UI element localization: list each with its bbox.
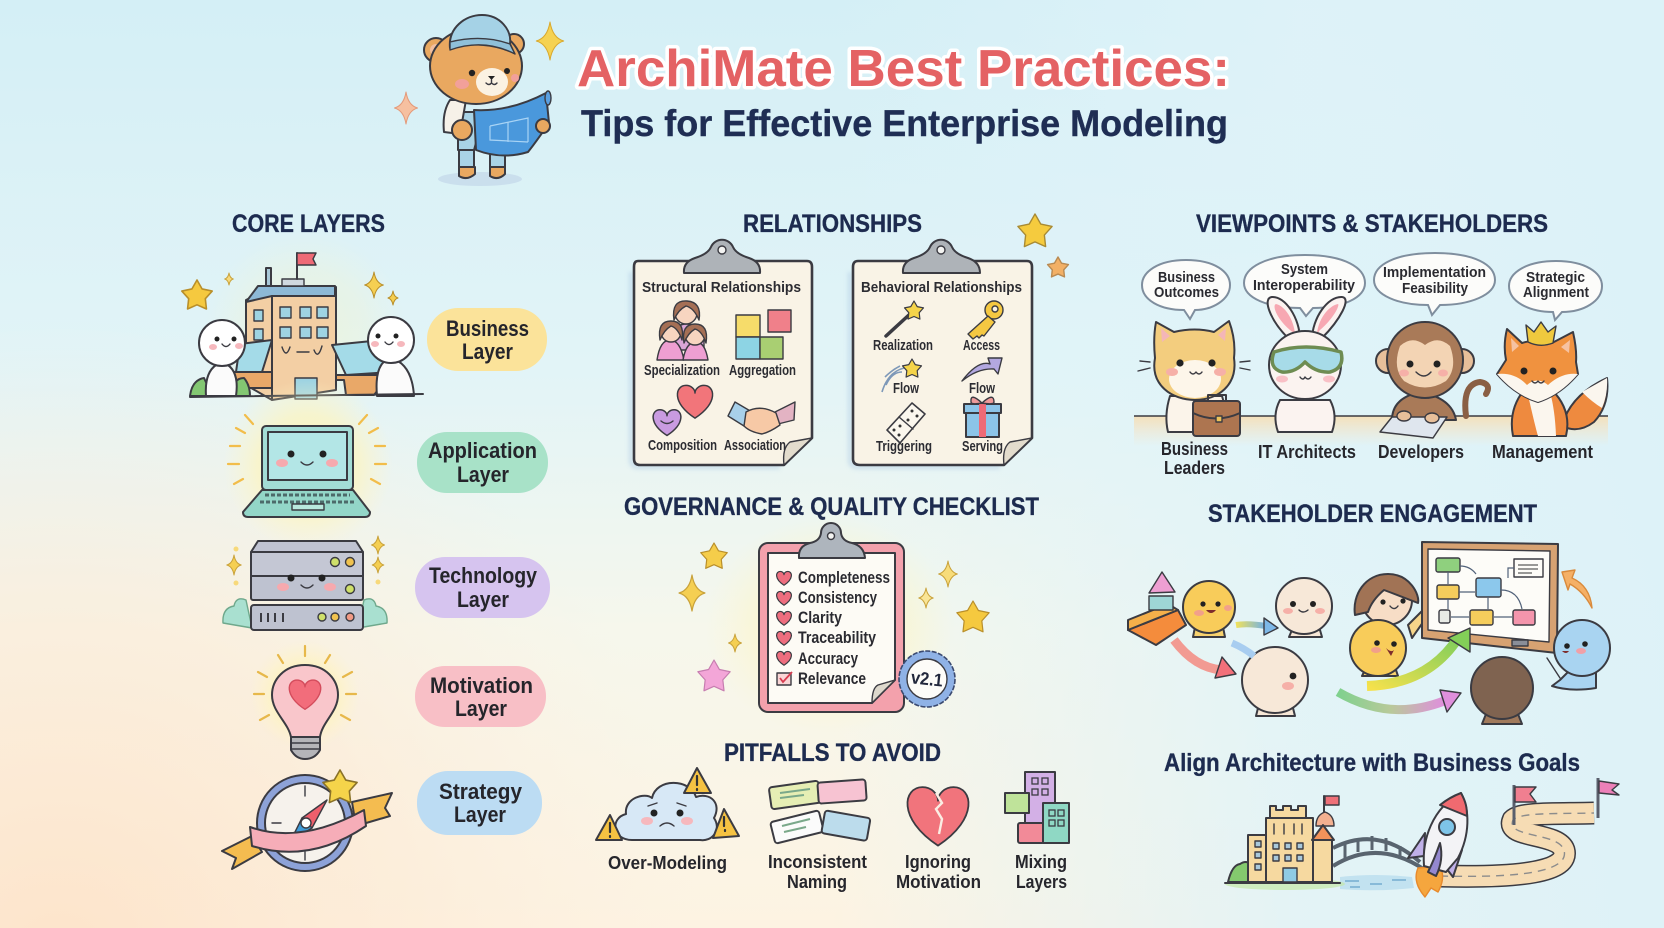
pill: application layer	[417, 432, 548, 493]
icon: rocket	[1408, 793, 1467, 897]
arrow: orange	[1562, 570, 1592, 608]
text: composition association: Composition	[648, 437, 717, 454]
icon: bear mascot with blueprint	[424, 15, 551, 186]
text: composition association	[648, 437, 786, 454]
icon: water	[1340, 875, 1414, 890]
label: business leaders	[1161, 439, 1228, 478]
icon: aggregation puzzle	[736, 310, 791, 359]
label: business leaders: Leaders	[1164, 458, 1225, 478]
title	[577, 40, 1230, 144]
panel: core layers	[182, 210, 550, 871]
heading: structural relationships: Structural Relationships	[642, 279, 801, 296]
character: yellow person with blocks	[1183, 581, 1235, 637]
icon: inconsistent cards	[769, 779, 871, 844]
label: it architects: IT Architects	[1258, 442, 1356, 462]
list: checklist items: Accuracy	[798, 650, 859, 668]
text: flow labels: Flow	[893, 380, 919, 397]
list: checklist items: Completeness	[798, 569, 890, 587]
speech bubble: system interoperability: Interoperability	[1253, 277, 1356, 294]
icon: composition hearts	[653, 385, 713, 436]
pill: technology layer: Technology	[429, 563, 538, 588]
character: cream person	[1276, 578, 1332, 637]
glow behind clipboard	[705, 515, 955, 735]
title: ArchiMate Best Practices:	[577, 40, 1230, 98]
speech bubble: business outcomes: Outcomes	[1154, 284, 1219, 301]
character: cat with briefcase	[1138, 321, 1250, 436]
pill: business layer: Business	[446, 316, 529, 341]
character: fox with crown	[1497, 322, 1607, 436]
pill: strategy layer	[417, 771, 542, 835]
icon: castle	[1225, 796, 1345, 890]
label: inconsistent naming: Inconsistent	[768, 852, 867, 872]
text: triggering serving	[876, 438, 1003, 455]
arrow: green purple	[1338, 690, 1461, 712]
label: mixing layers: Layers	[1016, 872, 1067, 892]
icon: specialization figures	[657, 301, 708, 360]
text: specialization aggregation	[644, 362, 796, 379]
label: ignoring motivation: Ignoring	[905, 852, 971, 872]
panel: relationships	[631, 210, 1068, 467]
text: realization access: Realization	[873, 337, 933, 354]
icon: access key	[968, 301, 1003, 339]
character: large cream person	[1242, 647, 1308, 716]
list: checklist items: Clarity	[798, 609, 843, 627]
speech bubble: strategic alignment: Alignment	[1523, 284, 1589, 301]
character: rabbit with goggles	[1268, 297, 1346, 432]
whiteboard	[1422, 542, 1558, 653]
icon: mixing layers	[1005, 772, 1069, 843]
icon: road	[1440, 813, 1594, 876]
pill: application layer: Layer	[457, 462, 509, 487]
speech bubble: strategic alignment	[1509, 261, 1602, 320]
badge: v2.1: v2.1	[910, 667, 944, 691]
icon: serving gift box	[964, 397, 1001, 437]
icon: over-modeling cloud	[596, 768, 739, 840]
label: inconsistent naming	[768, 852, 867, 892]
icon: association handshake	[728, 402, 795, 434]
badge: v2.1	[899, 651, 955, 707]
clipboard: checklist	[759, 523, 904, 712]
heading: relationships: RELATIONSHIPS	[743, 210, 922, 238]
speech bubble: implementation feasibility: Implementation	[1383, 264, 1486, 281]
icon: goal flags	[1514, 778, 1619, 825]
clipboard: behavioral relationships	[850, 240, 1032, 467]
heading: pitfalls: PITFALLS TO AVOID	[724, 739, 941, 767]
list: checklist items: Consistency	[798, 589, 878, 607]
pill: motivation layer: Motivation	[430, 673, 533, 698]
speech bubble: system interoperability	[1244, 255, 1365, 316]
pill: strategy layer: Layer	[454, 802, 506, 827]
panel: stakeholder engagement	[1128, 500, 1610, 724]
label: mixing layers: Mixing	[1015, 852, 1067, 872]
pill: motivation layer	[415, 666, 546, 727]
list: checklist items: Traceability	[798, 629, 877, 647]
panel: align architecture with business goals	[1164, 749, 1619, 897]
label: mixing layers	[1015, 852, 1067, 892]
text: triggering serving: Serving	[962, 438, 1003, 455]
label: inconsistent naming: Naming	[787, 872, 847, 892]
pill: motivation layer: Layer	[455, 696, 507, 721]
label: ignoring motivation	[896, 852, 981, 892]
icon: realization wand	[886, 301, 924, 336]
character: brown hair back of head	[1471, 657, 1533, 724]
heading: core layers: CORE LAYERS	[232, 210, 385, 238]
pill: technology layer: Layer	[457, 587, 509, 612]
table surface	[1134, 416, 1608, 446]
heading: governance: GOVERNANCE & QUALITY CHECKLIST	[624, 493, 1039, 521]
speech bubble: business outcomes: Business	[1158, 269, 1215, 286]
character: brown haired person	[1355, 574, 1426, 638]
speech bubble: strategic alignment: Strategic	[1526, 269, 1585, 286]
icon: business building	[182, 230, 423, 430]
icon: application laptop	[223, 380, 393, 550]
label: developers: Developers	[1378, 442, 1464, 462]
heading: align architecture: Align Architecture with Business Goals	[1164, 749, 1580, 777]
icon: sparkles beside bear	[394, 22, 564, 124]
heading: viewpoints: VIEWPOINTS & STAKEHOLDERS	[1196, 210, 1548, 238]
text: flow labels: Flow	[969, 380, 995, 397]
text: specialization aggregation: Aggregation	[729, 362, 796, 379]
label: over-modeling: Over-Modeling	[608, 853, 727, 873]
icon: stars near relationships	[1018, 214, 1068, 277]
icon: triggering dominoes	[887, 403, 925, 443]
panel: governance and quality checklist	[624, 493, 1039, 735]
text: realization access	[873, 337, 1000, 354]
speech bubble: implementation feasibility: Feasibility	[1402, 280, 1469, 297]
text: composition association: Association	[724, 437, 786, 454]
list: checklist items	[777, 569, 890, 688]
panel: pitfalls to avoid	[596, 739, 1069, 892]
icon: broken heart	[907, 787, 969, 846]
icon: building blocks	[1128, 572, 1186, 645]
character: monkey at keyboard	[1376, 322, 1488, 438]
arrows between people	[1174, 618, 1278, 678]
pill: business layer: Layer	[462, 339, 513, 364]
heading: behavioral relationships: Behavioral Relationships	[861, 279, 1022, 296]
icon: stars and sparkles	[679, 543, 989, 691]
label: management: Management	[1492, 442, 1593, 462]
text: realization access: Access	[963, 337, 1000, 354]
speech bubble: implementation feasibility	[1374, 253, 1495, 315]
label: ignoring motivation: Motivation	[896, 872, 981, 892]
heading: stakeholder engagement: STAKEHOLDER ENGAGEMENT	[1208, 500, 1537, 528]
text: flow labels	[893, 380, 995, 397]
pill: application layer: Application	[428, 438, 537, 463]
text: triggering serving: Triggering	[876, 438, 932, 455]
pill: business layer	[427, 308, 547, 371]
speech bubble: business outcomes	[1142, 260, 1230, 319]
clipboard: structural relationships	[631, 240, 812, 467]
subtitle: Tips for Effective Enterprise Modeling	[581, 103, 1228, 144]
panel: viewpoints and stakeholders	[1134, 210, 1608, 478]
pill: technology layer	[415, 557, 550, 618]
icon: bridge	[1333, 836, 1425, 870]
icon: flow star	[882, 359, 922, 392]
arrow: yellow green	[1367, 628, 1470, 686]
icon: technology server	[223, 536, 387, 630]
text: specialization aggregation: Specialization	[644, 362, 720, 379]
list: checklist items: Relevance	[798, 670, 866, 688]
label: business leaders: Business	[1161, 439, 1228, 459]
icon: strategy compass	[222, 770, 392, 871]
icon: motivation light bulb	[250, 640, 360, 759]
pill: strategy layer: Strategy	[439, 779, 523, 804]
character: yellow person at board	[1350, 620, 1406, 676]
speech bubble: system interoperability: System	[1281, 261, 1328, 278]
icon: flow arrow	[962, 358, 1002, 381]
character: blue person	[1547, 620, 1610, 690]
